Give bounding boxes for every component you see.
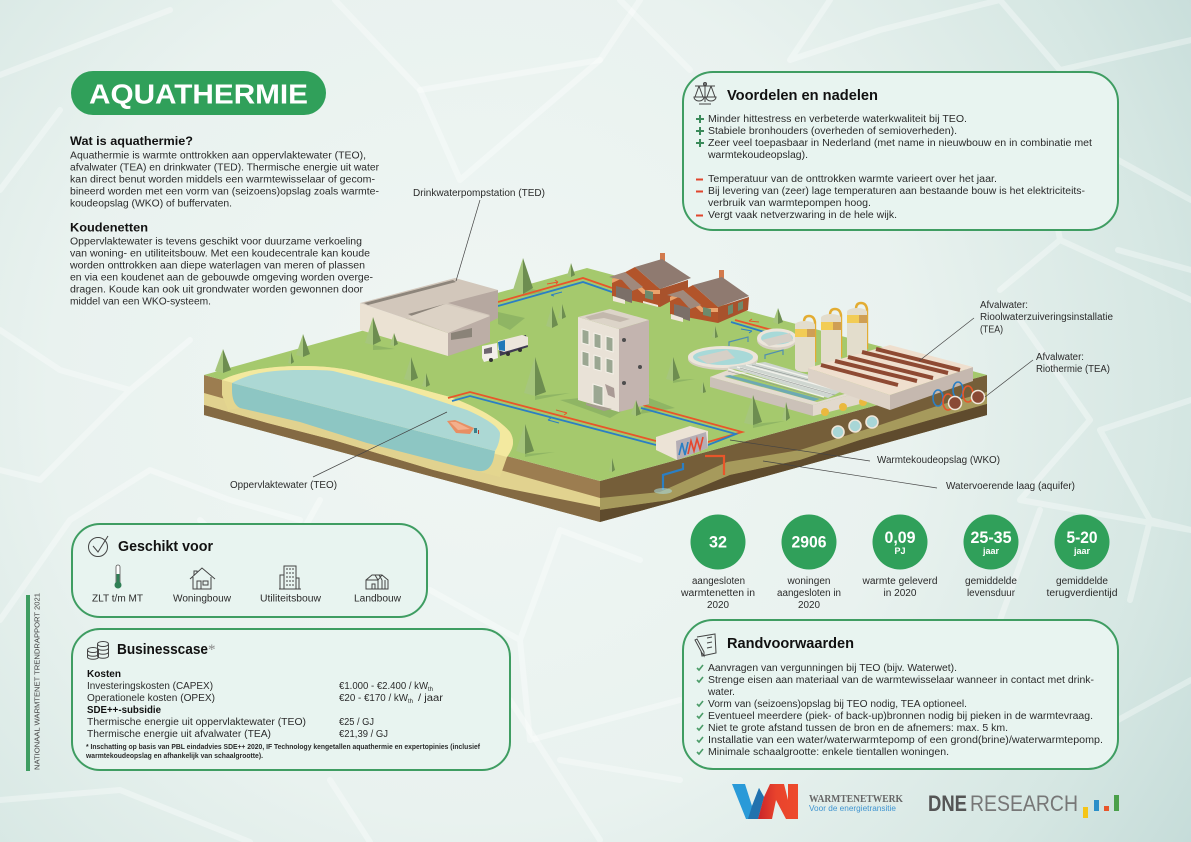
panel: geschikt voor: Woningbouw	[173, 594, 232, 604]
stat: warmte geleverd: PJ	[894, 546, 906, 556]
icon: scales	[694, 82, 716, 104]
warmtekoudeopslag unit	[654, 426, 724, 494]
icon: coins	[88, 642, 108, 659]
stat: woningen aangesloten: 2020	[798, 600, 820, 611]
text block: wat is aquathermie: Wat is aquathermie?	[70, 134, 193, 148]
panel: businesscase: Operationele kosten (OPEX)	[87, 693, 215, 704]
stat: warmte geleverd: warmte geleverd	[861, 576, 938, 587]
trees	[215, 258, 790, 472]
text block: koudenetten: middel van een WKO-systeem.	[70, 296, 211, 308]
panel: businesscase: / jaar	[418, 693, 444, 704]
text block: wat is aquathermie	[70, 134, 380, 210]
stat: terugverdientijd: jaar	[1073, 546, 1091, 556]
panel: voordelen en nadelen: Zeer veel toepasbaar in Nederland (met name in nieuwbouw en in combinatie met	[708, 138, 1092, 149]
panel: businesscase: *	[208, 642, 216, 658]
stat: woningen aangesloten: aangesloten in	[777, 588, 841, 599]
logo: warmtenetwerk: WARMTENETWERK	[809, 794, 903, 805]
panel: businesscase: th	[408, 699, 413, 705]
stat: terugverdientijd: gemiddelde	[1056, 576, 1108, 587]
stat: woningen aangesloten: 2906	[792, 534, 826, 552]
label: drinkwaterpompstation: Drinkwaterpompstation (TED)	[413, 188, 545, 199]
panel: randvoorwaarden: Strenge eisen aan materiaal van de warmtewisselaar wanneer in contact met drink-	[708, 675, 1094, 686]
heat pipes	[448, 278, 772, 445]
stat: terugverdientijd: 5-20	[1066, 529, 1098, 547]
text block: wat is aquathermie: Aquathermie is warmte onttrokken aan oppervlaktewater (TEO),	[70, 150, 366, 162]
stat: aangesloten warmtenetten: 2020	[707, 600, 729, 611]
panel: businesscase: * Inschatting op basis van PBL eindadvies SDE++ 2020, IF Technology kengetallen aquathermie en expertopinies (inclusief	[86, 742, 480, 751]
stat: terugverdientijd	[1046, 514, 1118, 599]
silos	[795, 303, 867, 372]
stat: woningen aangesloten: woningen	[786, 576, 830, 587]
label: riothermie: Riothermie (TEA)	[1036, 364, 1110, 375]
panel: businesscase: Thermische energie uit oppervlaktewater (TEO)	[87, 717, 306, 728]
text block: koudenetten	[69, 220, 373, 308]
logo: dne research	[928, 791, 1119, 818]
label: warmtekoudeopslag: Warmtekoudeopslag (WKO)	[877, 455, 1000, 466]
stat: warmte geleverd	[861, 514, 938, 599]
panel: businesscase: th	[428, 687, 433, 693]
title	[71, 71, 326, 115]
stat: levensduur: levensduur	[967, 588, 1016, 599]
stat: warmte geleverd: in 2020	[884, 588, 917, 599]
panel: voordelen en nadelen: Bij levering van (zeer) lage temperaturen aan bestaande bouw is het elektriciteits-	[708, 186, 1085, 197]
icon: house	[190, 568, 215, 589]
illustration: isometric aquathermie landscape	[204, 253, 987, 522]
panel: randvoorwaarden: Randvoorwaarden	[727, 636, 854, 652]
panel: randvoorwaarden: Installatie van een water/waterwarmtepomp of een grond(brine)/waterwarmtepomp.	[708, 735, 1103, 746]
text block: koudenetten: van woning- en utiliteitsbouw. Met een koudecentrale kan koude	[70, 248, 370, 260]
icon: checklist	[695, 634, 716, 656]
panel: businesscase: €21,39 / GJ	[339, 729, 388, 740]
logo: warmtenetwerk	[732, 784, 903, 819]
icon: office	[279, 566, 301, 589]
text block: wat is aquathermie: afvalwater (TEA) en drinkwater (TED). Thermische energie uit water	[70, 162, 380, 174]
text block: koudenetten: dragen. Koude kan ook uit grondwater worden gewonnen door	[70, 284, 364, 296]
panel: voordelen en nadelen: Stabiele bronhouders (overheden of semioverheden).	[708, 126, 957, 137]
panel: businesscase: Kosten	[87, 669, 121, 680]
stat: aangesloten warmtenetten: aangesloten	[692, 576, 745, 587]
panel: businesscase: warmtekoudeopslag en afhankelijk van schaalgrootte).	[85, 751, 263, 760]
building: drinkwaterpompstation	[360, 278, 498, 356]
label: rioolwaterzuivering	[919, 300, 1113, 361]
label: rioolwaterzuivering: Afvalwater:	[980, 300, 1028, 311]
panel: businesscase: Investeringskosten (CAPEX)	[87, 681, 213, 692]
icon: greenhouse	[366, 575, 388, 589]
lake with beach	[222, 366, 513, 477]
basin with aeration racks	[710, 362, 868, 416]
panel: geschikt voor	[72, 524, 427, 617]
label: riothermie	[985, 352, 1110, 397]
truck	[482, 335, 528, 362]
text block: wat is aquathermie: kan direct benut worden middels een warmtewisselaar of gecom-	[70, 174, 375, 186]
panel: randvoorwaarden: Minimale schaalgrootte: enkele tientallen woningen.	[708, 747, 949, 758]
panel: businesscase	[72, 629, 510, 770]
panel: voordelen en nadelen: warmtekoudeopslag).	[707, 150, 808, 161]
panel: geschikt voor: Geschikt voor	[118, 539, 213, 555]
boat	[447, 420, 479, 434]
text block: koudenetten: Koudenetten	[70, 220, 148, 234]
house 1	[609, 253, 691, 307]
panel: randvoorwaarden: Eventueel meerdere (piek- of back-up)bronnen nodig bij pieken in de warmtevraag.	[708, 711, 1093, 722]
panel: businesscase: €25 / GJ	[339, 717, 374, 728]
stat: aangesloten warmtenetten: 32	[709, 534, 727, 552]
stat: levensduur: 25-35	[970, 529, 1012, 547]
stat: levensduur	[964, 514, 1018, 599]
text block: wat is aquathermie: bineerd worden met een vorm van (seizoens)opslag zoals warmte-	[70, 186, 379, 198]
label: rioolwaterzuivering: (TEA)	[980, 324, 1003, 336]
icon: thermometer	[114, 565, 122, 588]
label: riothermie: Afvalwater:	[1036, 352, 1084, 363]
icon: check	[88, 536, 108, 556]
panel: voordelen en nadelen: Vergt vaak netverzwaring in de hele wijk.	[708, 210, 897, 221]
logo: dne research: RESEARCH	[970, 791, 1078, 816]
sewer pipes	[832, 382, 984, 438]
label: rioolwaterzuivering: Rioolwaterzuiveringsinstallatie	[980, 312, 1113, 323]
logo: warmtenetwerk: Voor de energietransitie	[809, 804, 897, 813]
text block: koudenetten: Oppervlaktewater is tevens geschikt voor duurzame verkoeling	[70, 236, 362, 248]
panel: randvoorwaarden: water.	[707, 687, 735, 698]
stat: warmte geleverd: 0,09	[884, 529, 916, 547]
label: aquifer	[763, 461, 1075, 492]
panel: businesscase: Businesscase	[117, 642, 208, 658]
label: oppervlaktewater	[230, 412, 447, 491]
clarifier tanks	[688, 328, 797, 370]
text block: koudenetten: en via een koudenet aan de gebouwde omgeving worden overge-	[70, 272, 373, 284]
stat: levensduur: gemiddelde	[965, 576, 1017, 587]
stat: woningen aangesloten	[777, 514, 841, 611]
title: AQUATHERMIE	[89, 78, 308, 110]
text block: wat is aquathermie: koudeopslag (WKO) of buffervaten.	[70, 198, 232, 210]
houses	[609, 253, 749, 323]
panel: businesscase: SDE++-subsidie	[87, 705, 161, 716]
panel: geschikt voor: ZLT t/m MT	[92, 594, 143, 604]
panel: voordelen en nadelen: Temperatuur van de onttrokken warmte varieert over het jaar.	[708, 174, 997, 185]
stat: aangesloten warmtenetten	[680, 514, 755, 611]
side label: report name	[26, 593, 42, 771]
label: oppervlaktewater: Oppervlaktewater (TEO)	[230, 480, 337, 491]
panel: businesscase: Thermische energie uit afvalwater (TEA)	[87, 729, 271, 740]
stat: terugverdientijd: terugverdientijd	[1046, 588, 1118, 599]
label: warmtekoudeopslag	[730, 440, 1000, 466]
panel: voordelen en nadelen: verbruik van warmtepompen hoog.	[708, 198, 871, 209]
label: aquifer: Watervoerende laag (aquifer)	[946, 481, 1075, 492]
panel: voordelen en nadelen: Minder hittestress en verbeterde waterkwaliteit bij TEO.	[708, 114, 967, 125]
panel: businesscase: €1.000 - €2.400 / kW	[339, 681, 429, 692]
building: office block	[578, 309, 649, 412]
panel: voordelen en nadelen: Voordelen en nadelen	[727, 88, 878, 104]
panel: businesscase: €20 - €170 / kW	[339, 693, 409, 704]
panel: geschikt voor: Landbouw	[354, 594, 402, 604]
stat: aangesloten warmtenetten: warmtenetten in	[680, 588, 755, 599]
panel: voordelen en nadelen	[683, 72, 1118, 230]
side label: report name: NATIONAAL WARMTENET TRENDRAPPORT 2021	[32, 593, 42, 770]
panel: randvoorwaarden: Aanvragen van vergunningen bij TEO (bijv. Waterwet).	[708, 663, 957, 674]
house 2	[667, 270, 749, 323]
text block: koudenetten: worden onttrokken aan diepe waterlagen van meren of plassen	[69, 260, 365, 272]
panel: geschikt voor: Utiliteitsbouw	[260, 594, 322, 604]
panel: randvoorwaarden	[683, 620, 1118, 769]
panel: randvoorwaarden: Niet te grote afstand tussen de bron en de afnemers: max. 5 km.	[708, 723, 1008, 734]
logo: dne research: DNE	[928, 791, 967, 816]
sludge drying beds	[808, 345, 973, 410]
stat: levensduur: jaar	[982, 546, 1000, 556]
panel: randvoorwaarden: Vorm van (seizoens)opslag bij TEO nodig, TEA optioneel.	[708, 699, 967, 710]
label: drinkwaterpompstation	[413, 188, 545, 281]
